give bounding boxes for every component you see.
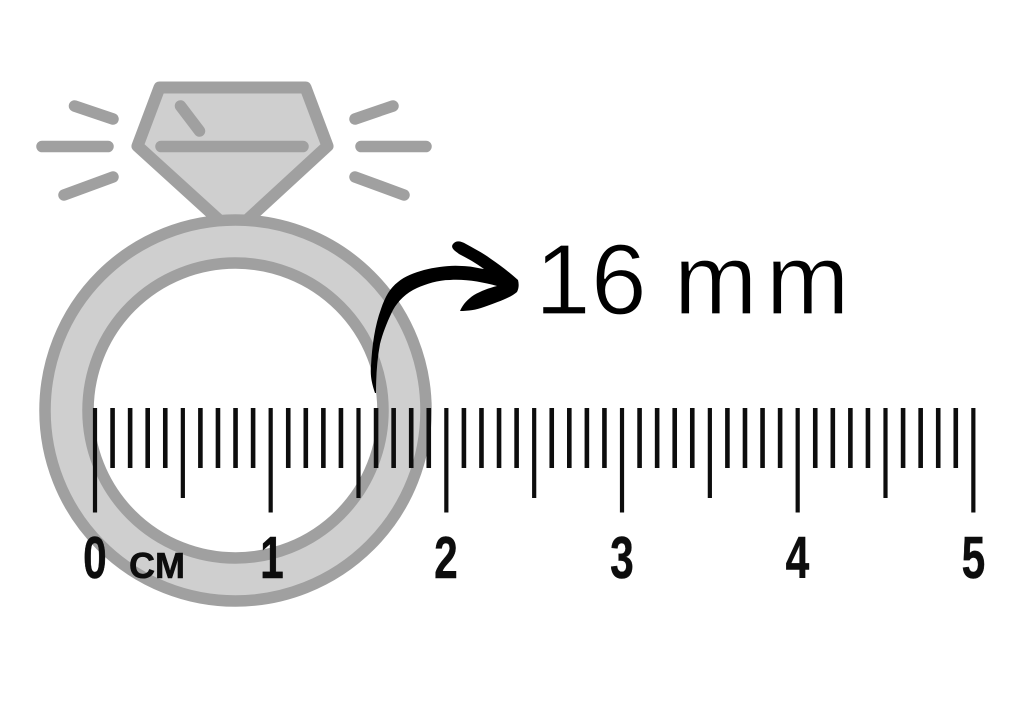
number 5: 5 bbox=[962, 524, 985, 591]
number 1: 1 bbox=[260, 524, 284, 591]
ruler: short ticks bbox=[113, 408, 956, 468]
unit label: cm: CM bbox=[129, 545, 185, 586]
ruler bbox=[95, 408, 973, 512]
number 4: 4 bbox=[786, 524, 810, 591]
number 0: 0 bbox=[83, 524, 107, 591]
icon: ring band bbox=[45, 220, 426, 601]
measurement label: 16 mm: 16 mm bbox=[535, 224, 849, 336]
icon: sparkle rays right bbox=[355, 106, 426, 195]
arrow: from ring edge to measurement bbox=[371, 241, 519, 393]
icon: sparkle rays left bbox=[42, 106, 113, 195]
ruler numbers bbox=[83, 524, 985, 591]
number 2: 2 bbox=[434, 524, 458, 591]
ruler: centimetre ticks bbox=[95, 408, 973, 512]
icon: diamond ring bbox=[42, 88, 426, 601]
icon: diamond gem bbox=[138, 88, 328, 221]
ruler: half-centimetre ticks bbox=[183, 408, 886, 498]
number 3: 3 bbox=[610, 524, 634, 591]
